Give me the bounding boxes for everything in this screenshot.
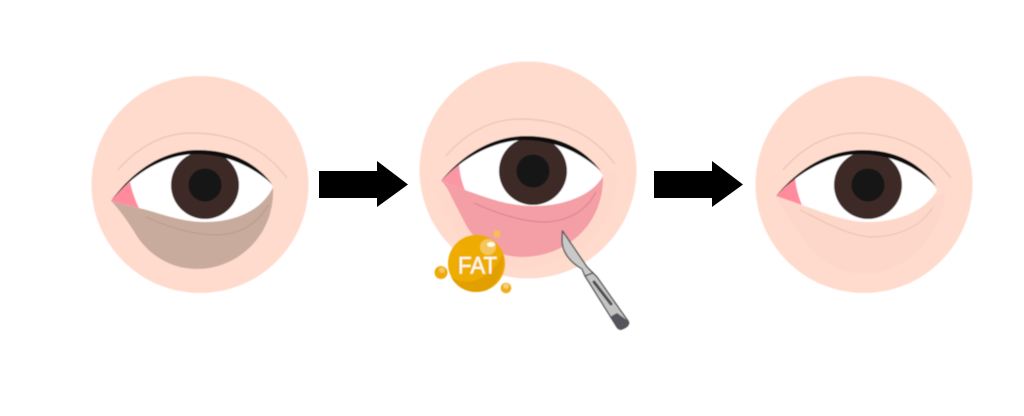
- bubble right highlight: [503, 283, 509, 289]
- skin circle: [420, 62, 636, 278]
- iris: [171, 151, 239, 219]
- handle groove: [594, 282, 611, 304]
- upper eyelid crease: [446, 119, 615, 164]
- arrow: second step: [654, 161, 743, 207]
- icon: fat globule: [434, 230, 511, 293]
- panel: eye during surgery, with pink exposed area: [420, 62, 636, 278]
- handle: [585, 273, 629, 329]
- highlight: [480, 239, 496, 255]
- exposed pink tissue: [441, 176, 603, 257]
- pupil: [516, 154, 550, 188]
- iris: [834, 151, 902, 219]
- tear duct: [776, 178, 802, 205]
- blade: [562, 231, 593, 276]
- main globule: [448, 235, 505, 292]
- panel: eye before, with dark under-eye bag: [92, 76, 308, 293]
- eye white: [111, 151, 273, 222]
- skin circle: [92, 76, 308, 293]
- under-eye crease: [146, 205, 268, 235]
- tear duct: [441, 165, 465, 190]
- handle grip: [610, 313, 629, 329]
- eye white: [441, 137, 603, 206]
- under-eye bag: [111, 188, 273, 269]
- bubble left highlight: [439, 267, 445, 273]
- under-eye crease: [800, 207, 933, 237]
- upper eyelash line: [776, 150, 936, 196]
- under-eye crease: [474, 192, 596, 222]
- FAT label: FAT: [458, 252, 497, 280]
- tear duct: [111, 182, 139, 208]
- eye white: [776, 151, 937, 222]
- upper eyelash line: [111, 150, 272, 201]
- globule shading: [451, 254, 503, 292]
- iris: [499, 137, 567, 205]
- icon: scalpel: [562, 231, 629, 329]
- skin circle: [756, 76, 972, 293]
- upper eyelash line: [441, 136, 601, 181]
- surgical shading: [441, 172, 610, 263]
- small bubble right: [501, 283, 511, 293]
- highlight spot: [487, 242, 495, 247]
- arrow: first step: [319, 161, 408, 207]
- small bubble left: [434, 266, 448, 279]
- pupil: [852, 168, 884, 202]
- panel: eye after, smooth result: [756, 76, 972, 293]
- faint healed area: [775, 192, 945, 274]
- small bubble top: [494, 230, 500, 238]
- upper eyelid crease: [783, 133, 951, 178]
- pupil: [188, 168, 222, 202]
- upper eyelid crease: [118, 133, 287, 178]
